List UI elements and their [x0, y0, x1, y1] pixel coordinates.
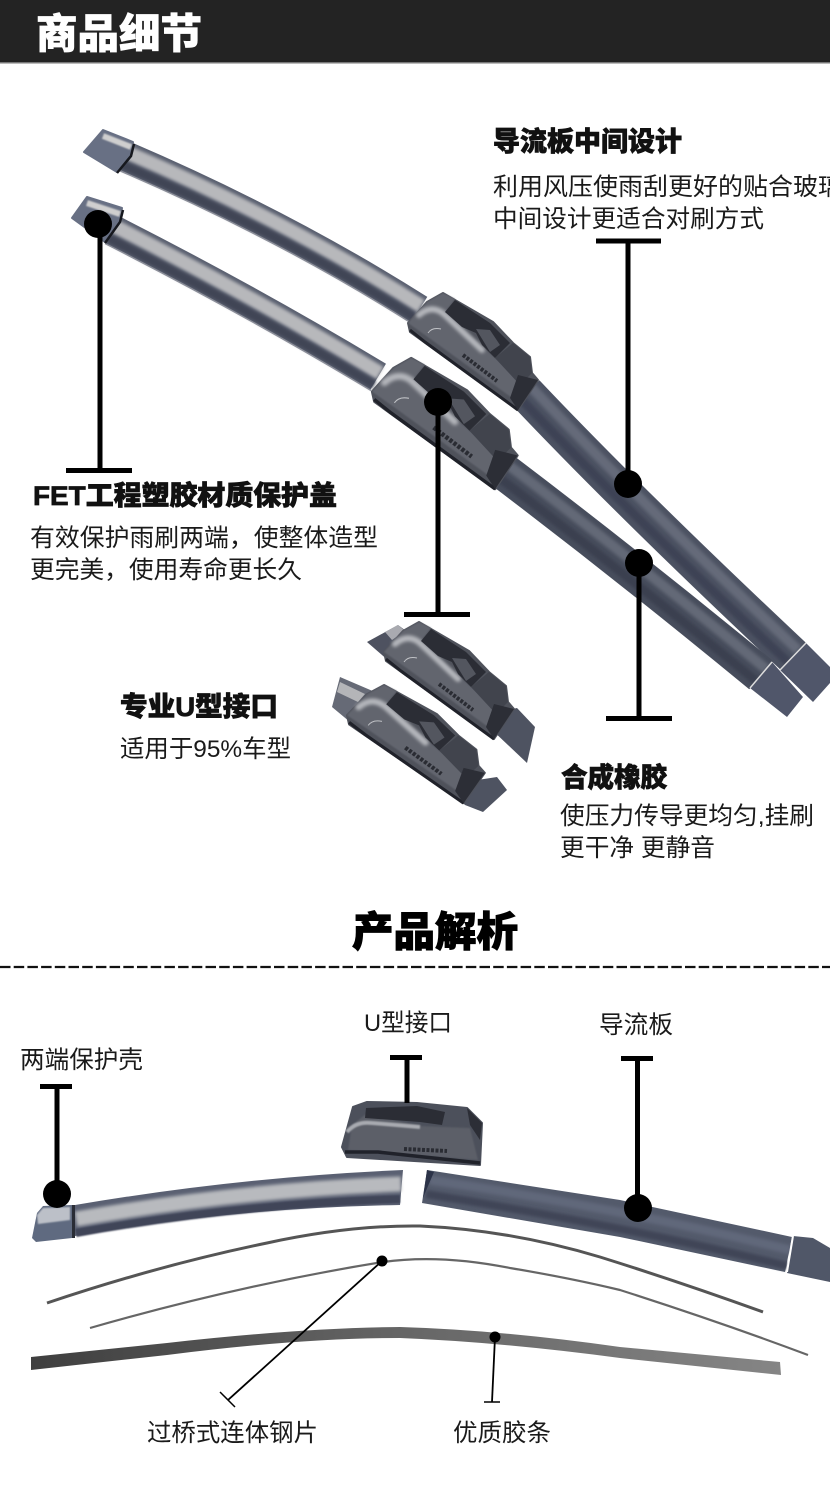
- steel strip 2: [90, 1259, 808, 1355]
- text block: deflector: 利用风压使雨刮更好的贴合玻璃: [493, 173, 830, 201]
- text block: rubber: 使压力传导更均匀,挂刷: [560, 802, 814, 830]
- exploded blade: left section: [32, 1170, 403, 1242]
- exploded blade: right section: [422, 1170, 830, 1282]
- text block: U connector: [120, 691, 291, 763]
- label: rubber strip: 优质胶条: [453, 1419, 551, 1447]
- label: steel strip: 过桥式连体钢片: [147, 1419, 318, 1447]
- callout: deflector pointer: [596, 238, 661, 498]
- callout: steel strip pointer: [220, 1256, 388, 1407]
- callout: rubber strip pointer: [484, 1332, 500, 1402]
- small connector 2: [332, 677, 507, 812]
- small connector 1: [367, 622, 535, 763]
- label: end caps: 两端保护壳: [20, 1046, 143, 1074]
- lower blade connector: [372, 358, 518, 489]
- text block: deflector: [493, 127, 830, 233]
- title: 商品细节: 商品细节: [36, 11, 202, 57]
- callout: end cap pointer: [40, 1084, 72, 1208]
- text block: rubber: [560, 762, 814, 862]
- callout: PET protective cap pointer: [66, 210, 132, 473]
- text block: protective cap: 有效保护雨刷两端，使整体造型: [30, 524, 378, 552]
- text block: deflector: 导流板中间设计: [493, 127, 682, 157]
- callout: rubber pointer: [606, 549, 672, 721]
- text block: rubber: 更干净 更静音: [560, 834, 715, 862]
- lower wiper blade: [72, 197, 803, 717]
- text block: U connector: 专业U型接口: [120, 691, 278, 722]
- callout: deflector pointer 2: [621, 1056, 653, 1222]
- callout: connector pointer: [390, 1055, 422, 1103]
- exploded connector: [342, 1102, 482, 1165]
- steel strip 1: [47, 1226, 763, 1312]
- rubber strip: [31, 1327, 781, 1375]
- text block: protective cap: FET工程塑胶材质保护盖: [33, 480, 337, 511]
- text block: rubber: 合成橡胶: [561, 762, 667, 793]
- label: U connector: U型接口: [364, 1009, 452, 1037]
- text block: protective cap: [30, 480, 378, 584]
- section heading: 产品解析: 产品解析: [352, 909, 518, 955]
- label: deflector: 导流板: [599, 1011, 673, 1039]
- callout: U connector pointer: [404, 388, 470, 617]
- text block: U connector: 适用于95%车型: [120, 735, 291, 763]
- upper wiper blade: [84, 130, 830, 702]
- upper blade connector: [408, 293, 538, 410]
- text block: protective cap: 更完美，使用寿命更长久: [30, 556, 302, 584]
- text block: deflector: 中间设计更适合对刷方式: [493, 205, 764, 233]
- header bar: [0, 0, 830, 64]
